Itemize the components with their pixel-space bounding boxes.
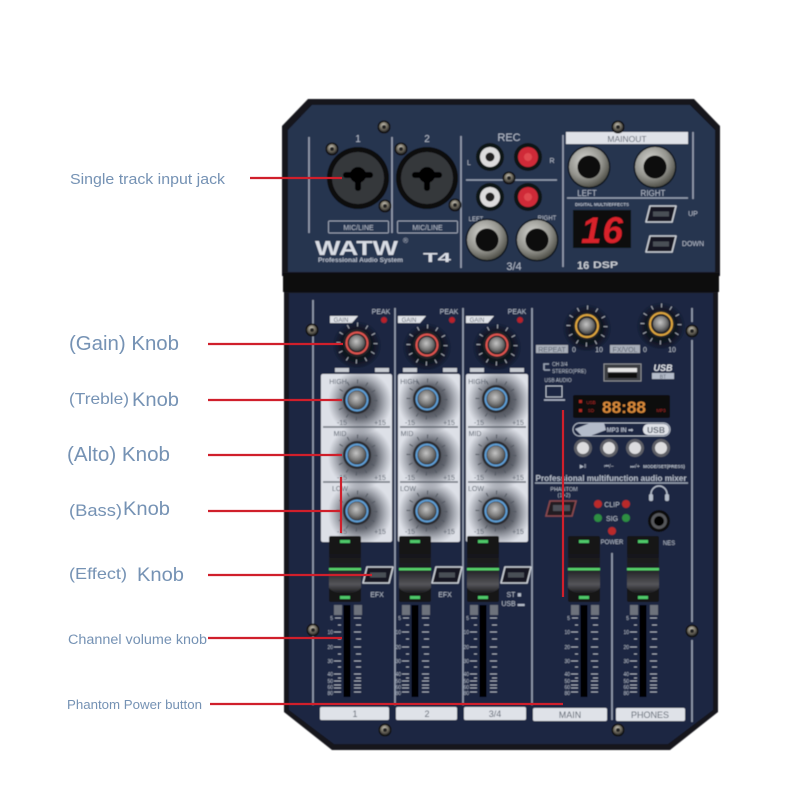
input channel 2 label: 2 — [424, 134, 430, 145]
EQ panel channel 2: HIGH — [400, 379, 418, 386]
EQ panel channel 2: -15 — [405, 529, 415, 536]
status LEDs — [594, 500, 630, 546]
MP3 player display: SD — [588, 408, 595, 413]
player buttons: MODE/SET(PRESS) — [643, 464, 685, 469]
MIC/LINE label 2 — [398, 221, 458, 233]
input channel 1 label: 1 — [355, 134, 361, 145]
player buttons: ⏭/+ — [630, 464, 640, 470]
USB BT badge: USB — [653, 363, 673, 373]
callout: bass knob — [69, 477, 341, 533]
main fader — [564, 536, 600, 697]
effect and stereo buttons — [363, 567, 531, 608]
gain knobs row — [330, 309, 527, 372]
brand logo: Professional Audio System — [318, 258, 403, 264]
EQ panel channel 2: +15 — [443, 475, 455, 482]
callout: channel volume knob: Channel volume knob — [68, 632, 207, 647]
EQ panel channel 1 — [321, 370, 392, 545]
mixer body — [282, 99, 720, 750]
channel name strip: MAIN — [559, 710, 581, 720]
effect and stereo buttons: USB ▬ — [501, 601, 525, 608]
EQ panel channel 1: HIGH — [329, 379, 347, 386]
player buttons — [574, 439, 685, 470]
gain knobs row: PEAK — [440, 309, 459, 316]
gain knobs row: GAIN — [334, 318, 348, 324]
phantom power button: PHANTOM — [550, 487, 578, 493]
EQ panel channel 3/4: +15 — [512, 420, 524, 427]
main out section — [566, 132, 688, 198]
MP3 IN USB label: MP3 IN ➡ — [607, 428, 634, 434]
EQ panel channel 1: -15 — [337, 529, 347, 536]
3/4 line input jacks — [466, 216, 558, 273]
callout: alto knob: (Alto) Knob — [67, 444, 170, 466]
3/4 line input jacks: 3/4 — [506, 261, 522, 273]
channel name strip — [320, 707, 685, 721]
MIC/LINE label 1: MIC/LINE — [343, 225, 374, 232]
USB BT badge — [652, 363, 674, 380]
lower panel screws — [306, 324, 698, 736]
MIC/LINE label 1 — [328, 221, 388, 233]
main out section: RIGHT — [641, 189, 666, 198]
channel name strip: 2 — [424, 709, 430, 719]
EQ panel channel 3/4: +15 — [512, 475, 524, 482]
effect and stereo buttons: ST ■ — [506, 592, 522, 599]
channel 3/4 fader — [463, 536, 499, 697]
up and down buttons — [646, 206, 704, 252]
channel name strip: 1 — [352, 709, 358, 719]
REC section: R — [549, 158, 555, 165]
callout: effect knob: (Effect) — [69, 566, 127, 583]
repeat and effects volume knobs: 0 — [572, 347, 576, 354]
up and down buttons: DOWN — [682, 241, 704, 248]
EQ panel channel 1: -15 — [337, 475, 347, 482]
headphones output — [648, 486, 675, 547]
effect and stereo buttons: EFX — [370, 592, 384, 599]
lower panel dividers — [313, 300, 692, 722]
phantom power button: (1+2) — [558, 493, 571, 499]
EQ panel channel 1: -15 — [337, 420, 347, 427]
repeat and effects volume knobs: REPEAT — [538, 347, 566, 354]
EQ panel channel 2: -15 — [405, 475, 415, 482]
top panel dividers — [309, 132, 693, 268]
channel name strip: 3/4 — [489, 709, 501, 719]
channel 1 fader — [327, 536, 362, 697]
MP3 IN USB label — [573, 423, 670, 436]
EQ panel channel 3/4: +15 — [512, 529, 524, 536]
USB audio selector: STEREO(PRE) — [552, 369, 587, 375]
brand logo: WATW — [315, 238, 398, 260]
EQ panel channel 3/4: -15 — [474, 475, 484, 482]
3/4 line input jacks: RIGHT — [538, 216, 557, 222]
headphones output: NES — [663, 541, 675, 547]
brand logo — [315, 237, 409, 264]
XLR combo jack 1 — [327, 147, 389, 209]
XLR combo jack 2 — [396, 147, 458, 209]
callout: phantom power button — [67, 410, 563, 712]
USB BT badge: BT — [660, 374, 666, 380]
effect and stereo buttons: EFX — [438, 592, 452, 599]
EQ panel channel 1: +15 — [374, 529, 386, 536]
callout: effect knob: Knob — [137, 565, 184, 586]
main out section: LEFT — [577, 189, 597, 198]
repeat and effects volume knobs — [536, 299, 686, 354]
MP3 player display: 88:88 — [602, 398, 646, 417]
EQ panel channel 2: +15 — [443, 420, 455, 427]
repeat and effects volume knobs: FX/VOL — [613, 347, 638, 354]
status LEDs: SIG — [606, 516, 618, 523]
EQ panel channel 1: +15 — [374, 420, 386, 427]
MP3 player display — [573, 395, 670, 418]
product description: Professional multifunction audio mixer — [536, 473, 687, 483]
REC section — [467, 132, 555, 211]
channel name strip: PHONES — [631, 710, 669, 720]
USB audio selector — [544, 362, 587, 400]
callout: bass knob: Knob — [123, 499, 170, 520]
EQ panel channel 3/4: -15 — [474, 420, 484, 427]
EQ panel channel 3/4: HIGH — [468, 379, 486, 386]
callout: treble knob: Knob — [132, 390, 179, 411]
main out section: MAINOUT — [607, 134, 647, 144]
phones fader — [623, 536, 659, 697]
status LEDs: CLIP — [604, 502, 620, 509]
EQ panel channel 1: +15 — [374, 475, 386, 482]
repeat and effects volume knobs: 10 — [668, 347, 676, 354]
MP3 IN USB label: USB — [647, 425, 665, 435]
gain knobs row: GAIN — [470, 318, 484, 324]
top panel screws — [326, 120, 624, 212]
USB audio selector: CH 3/4 — [552, 362, 568, 368]
EQ panel channel 2: MID — [401, 431, 413, 438]
repeat and effects volume knobs: 10 — [595, 347, 603, 354]
gain knobs row: GAIN — [402, 318, 416, 324]
callout: effect knob — [69, 565, 372, 586]
EQ panel channel 1: MID — [334, 431, 346, 438]
EQ panel channel 3/4: LOW — [468, 486, 484, 493]
gain knobs row: PEAK — [372, 309, 391, 316]
effects preset display: DIGITAL MULTI/EFFECTS — [575, 202, 629, 207]
EQ panel channel 2: +15 — [443, 529, 455, 536]
effects preset display: 16 — [577, 260, 589, 272]
callout: phantom power button: Phantom Power button — [67, 697, 202, 712]
effects preset display: DSP — [593, 260, 618, 270]
effects preset display — [573, 202, 631, 272]
EQ panel channel 3/4: -15 — [474, 529, 484, 536]
player buttons: ▶‖ — [580, 464, 586, 470]
phantom power button — [546, 487, 578, 516]
REC section: REC — [497, 132, 521, 144]
player buttons: ⏮/− — [604, 464, 614, 470]
mixer device — [282, 99, 720, 750]
EQ panel channel 1: LOW — [332, 486, 348, 493]
status LEDs: POWER — [601, 540, 624, 546]
repeat and effects volume knobs: 0 — [643, 347, 647, 354]
EQ panel channel 2 — [398, 369, 462, 545]
EQ panel channel 2: LOW — [400, 486, 416, 493]
callout: gain knob: (Gain) Knob — [69, 333, 179, 355]
callout: treble knob: (Treble) — [69, 391, 129, 408]
EQ panel channel 3/4 — [466, 369, 531, 545]
effects preset display: 16 — [581, 210, 623, 251]
callout: single track input jack: Single track input jack — [70, 171, 226, 188]
callout: bass knob: (Bass) — [69, 501, 122, 520]
3/4 line input jacks: LEFT — [469, 217, 484, 223]
MIC/LINE label 2: MIC/LINE — [412, 225, 443, 232]
up and down buttons: UP — [688, 211, 698, 218]
REC section: L — [467, 160, 471, 167]
EQ panel channel 3/4: MID — [469, 431, 481, 438]
MP3 player display: USB — [586, 400, 596, 405]
model name: T4 — [423, 250, 452, 265]
USB audio selector: USB AUDIO — [544, 378, 572, 384]
gain knobs row: PEAK — [508, 309, 527, 316]
callout: treble knob — [69, 390, 342, 411]
MP3 player display: MP3 — [656, 408, 666, 413]
EQ panel channel 2: -15 — [405, 420, 415, 427]
brand logo: ® — [403, 237, 409, 245]
channel 2 fader — [395, 536, 431, 697]
USB port — [604, 364, 641, 381]
